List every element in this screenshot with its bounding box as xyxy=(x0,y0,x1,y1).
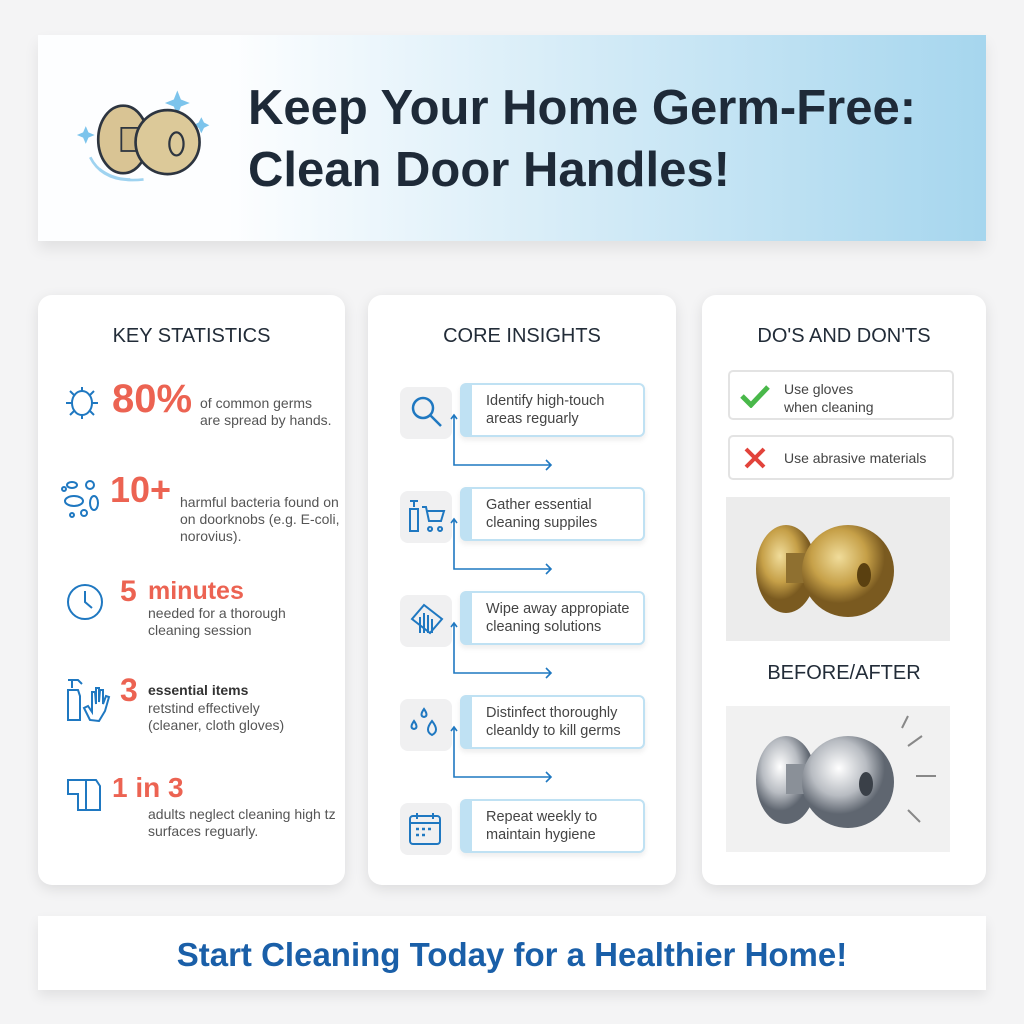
stat 10+ xyxy=(61,469,340,544)
stat 1 in 3: adults neglect cleaning high tz xyxy=(148,806,336,822)
step 1 xyxy=(400,383,646,471)
step 3: Wipe away appropiate xyxy=(486,601,629,617)
before after label: BEFORE/AFTER xyxy=(767,662,921,684)
stat 80% xyxy=(66,377,332,428)
panel: dos and donts xyxy=(702,295,986,885)
stat 1 in 3 xyxy=(67,772,336,839)
step 2 xyxy=(400,487,646,575)
step 5: 5. xyxy=(464,719,475,734)
stat 3 items xyxy=(67,672,284,733)
stat 5 minutes: cleaning session xyxy=(148,622,252,638)
step 3: cleaning solutions xyxy=(486,619,601,635)
do item: when cleaning xyxy=(784,399,874,415)
stat 5 minutes: minutes xyxy=(148,577,244,605)
stat 10+: 10+ xyxy=(110,469,171,510)
footer banner: Start Cleaning Today for a Healthier Home! xyxy=(177,936,847,973)
stat 3 items: essential items xyxy=(148,682,248,698)
stat 3 items: retstind effectively xyxy=(148,700,260,716)
heading: CORE INSIGHTS xyxy=(443,325,601,347)
heading: KEY STATISTICS xyxy=(113,325,270,347)
dont item: Use abrasive materials xyxy=(784,450,926,466)
icon: door knob xyxy=(77,90,210,182)
step 2: cleaning suppiles xyxy=(486,515,597,531)
step 3: 3 xyxy=(464,615,471,630)
stat 5 minutes: needed for a thorough xyxy=(148,605,286,621)
step 1: 1 xyxy=(464,407,471,422)
title: Keep Your Home Germ-Free: xyxy=(248,81,916,135)
step 2: Gather essential xyxy=(486,497,592,513)
do item: Use gloves xyxy=(784,381,853,397)
stat 80%: 80% xyxy=(112,377,192,421)
after image xyxy=(726,706,950,852)
stat 3 items: (cleaner, cloth gloves) xyxy=(148,717,284,733)
do item xyxy=(728,370,954,420)
stat 80%: are spread by hands. xyxy=(200,412,332,428)
title xyxy=(248,81,916,197)
step 5: cleanldy to kill germs xyxy=(486,723,621,739)
stat 1 in 3: 1 in 3 xyxy=(112,772,184,803)
dont item xyxy=(728,435,954,480)
panel: core insights xyxy=(368,295,676,885)
step 5 xyxy=(400,695,646,783)
step 6: maintain hygiene xyxy=(486,827,596,843)
stat 5 minutes: 5 xyxy=(120,575,137,608)
title: Clean Door Handles! xyxy=(248,143,730,197)
stat 1 in 3: surfaces reguarly. xyxy=(148,823,258,839)
heading: DO'S AND DON'TS xyxy=(757,325,931,347)
footer banner xyxy=(38,916,986,990)
stat 80%: of common germs xyxy=(200,395,312,411)
step 2: 2 xyxy=(464,511,471,526)
before image xyxy=(726,497,950,641)
stat 5 minutes xyxy=(67,575,286,638)
step 1: Identify high-touch xyxy=(486,393,604,409)
stat 10+: on doorknobs (e.g. E-coli, xyxy=(180,511,340,527)
step 6 xyxy=(400,799,646,856)
step 6: 6 xyxy=(464,823,471,838)
stat 10+: norovius). xyxy=(180,528,241,544)
panel: key statistics xyxy=(38,295,345,885)
step 5: Distinfect thoroughly xyxy=(486,705,617,721)
header banner xyxy=(38,35,986,241)
stat 10+: harmful bacteria found on xyxy=(180,494,339,510)
step 3 xyxy=(400,591,646,679)
step 6: Repeat weekly to xyxy=(486,809,597,825)
step 1: areas reguarly xyxy=(486,411,579,427)
stat 3 items: 3 xyxy=(120,672,138,708)
